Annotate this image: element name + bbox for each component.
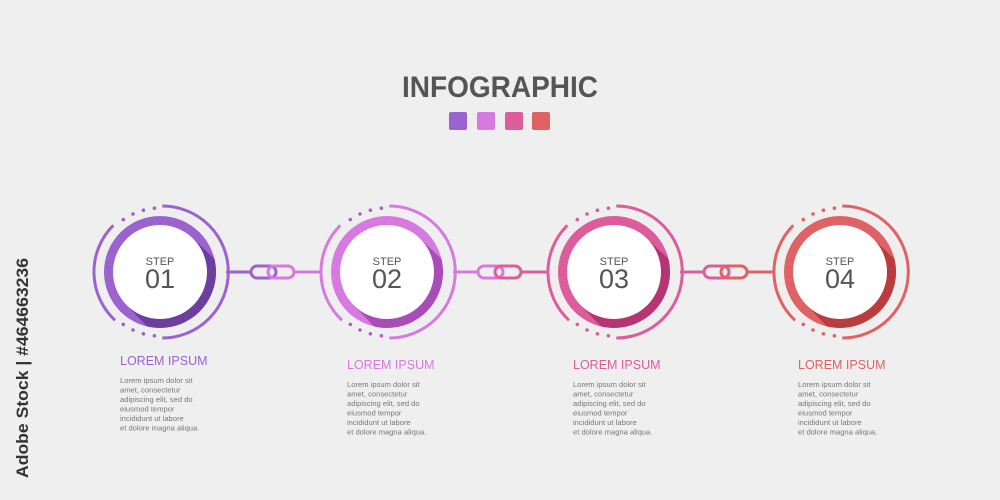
text block: step 4: Lorem ipsum dolor sit: [798, 380, 871, 389]
step 2 circle: 02: [372, 264, 402, 294]
text block: step 3: incididunt ut labore: [573, 418, 637, 427]
text block: step 3: et dolore magna aliqua.: [573, 428, 652, 436]
step 4 circle: [772, 204, 910, 340]
text block: step 3: amet, consectetur: [573, 390, 634, 398]
text block: step 3: [573, 358, 661, 436]
text block: step 4: LOREM IPSUM: [798, 358, 886, 372]
text block: step 4: [798, 358, 886, 436]
text block: step 2: incididunt ut labore: [347, 418, 411, 427]
connector 1-2: [226, 266, 321, 278]
text block: step 2: [347, 358, 435, 436]
text block: step 4: et dolore magna aliqua.: [798, 428, 877, 436]
watermark: vertical stock id: Adobe Stock | #464663236: [13, 258, 32, 478]
text block: step 4: adipiscing elit, sed do: [798, 399, 871, 408]
text block: step 1: Lorem ipsum dolor sit: [120, 376, 193, 385]
text block: step 1: [120, 354, 208, 432]
text block: step 2: et dolore magna aliqua.: [347, 428, 426, 436]
text block: step 2: adipiscing elit, sed do: [347, 399, 420, 408]
text block: step 3: LOREM IPSUM: [573, 358, 661, 372]
text block: step 3: Lorem ipsum dolor sit: [573, 380, 646, 389]
text block: step 2: amet, consectetur: [347, 390, 408, 398]
title: INFOGRAPHIC: [402, 71, 598, 104]
step 3 circle: STEP: [600, 256, 628, 268]
text block: step 4: incididunt ut labore: [798, 418, 862, 427]
text block: step 1: et dolore magna aliqua.: [120, 424, 199, 432]
step 2 circle: [320, 204, 457, 340]
text block: step 2: eiusmod tempor: [347, 408, 402, 418]
step 4 circle: STEP: [826, 256, 854, 268]
text block: step 1: eiusmod tempor: [120, 404, 175, 414]
text block: step 1: incididunt ut labore: [120, 414, 184, 423]
step 4 circle: 04: [825, 264, 855, 294]
text block: step 3: adipiscing elit, sed do: [573, 399, 646, 408]
color squares: [449, 112, 550, 130]
text block: step 4: eiusmod tempor: [798, 408, 853, 418]
step 1 circle: [92, 204, 230, 340]
text block: step 2: LOREM IPSUM: [347, 358, 435, 372]
text block: step 1: LOREM IPSUM: [120, 354, 208, 368]
text block: step 4: amet, consectetur: [798, 390, 859, 398]
step 3 circle: 03: [599, 264, 629, 294]
text block: step 1: adipiscing elit, sed do: [120, 395, 193, 404]
text block: step 2: Lorem ipsum dolor sit: [347, 380, 420, 389]
step 1 circle: STEP: [146, 256, 174, 268]
connector 2-3: [453, 266, 548, 278]
connector 3-4: [680, 266, 774, 278]
step 2 circle: STEP: [373, 256, 401, 268]
step 3 circle: [546, 204, 684, 340]
text block: step 3: eiusmod tempor: [573, 408, 628, 418]
step 1 circle: 01: [145, 264, 175, 294]
text block: step 1: amet, consectetur: [120, 386, 181, 394]
